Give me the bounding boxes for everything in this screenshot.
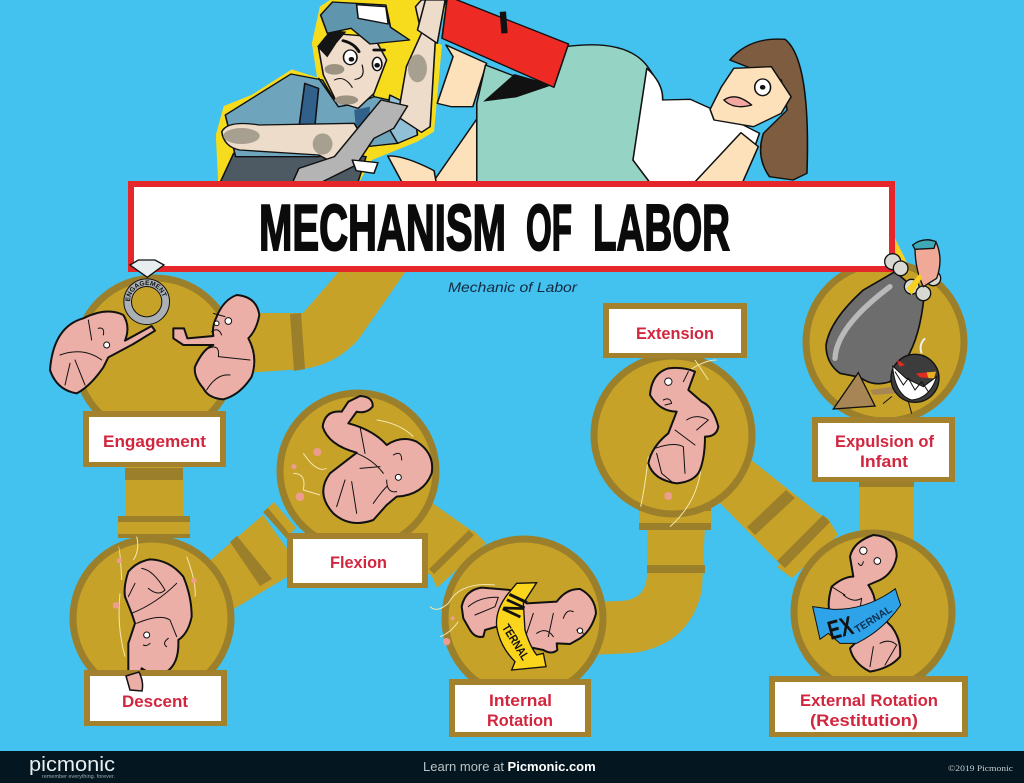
arrow: internal (496, 583, 546, 670)
engagement ring: ENGAGEMENT (125, 280, 167, 302)
label: external rotation: (Restitution) (810, 711, 918, 730)
pipe: external rotation to expulsion (859, 478, 914, 548)
label: internal rotation (449, 679, 591, 737)
label: expulsion of infant: Expulsion of (835, 432, 934, 451)
pipe: engagement to descent (118, 465, 190, 538)
descent baby (113, 537, 197, 692)
pipe network (118, 268, 914, 655)
label: extension (603, 303, 747, 358)
label: flexion: Flexion (330, 553, 387, 572)
title text: MECHANISM (259, 191, 506, 264)
footer copyright: ©2019 Picmonic (948, 764, 1014, 773)
pipe: descent to flexion (205, 502, 296, 610)
baby eye (104, 342, 110, 348)
cannon (826, 272, 924, 384)
baby pushing ring (173, 295, 259, 399)
baby with ring (50, 312, 155, 393)
cannon stand (833, 373, 875, 409)
title text: OF (526, 191, 572, 264)
extension baby (641, 360, 718, 527)
smoke cloud (885, 254, 941, 301)
label: internal rotation: Internal (489, 691, 552, 710)
arrow text: EX: EX (824, 610, 857, 646)
baby details (60, 320, 104, 385)
arrow text: TERNAL: TERNAL (853, 603, 895, 636)
external rotation baby (813, 535, 901, 672)
circle: external rotation (794, 533, 952, 691)
patient (388, 0, 807, 183)
circle: descent (73, 539, 231, 697)
engagement ring (123, 259, 170, 325)
footer link: Learn more at Picmonic.com (423, 759, 596, 774)
label: internal rotation: Rotation (487, 711, 553, 730)
label: extension: Extension (636, 324, 714, 343)
label: external rotation (769, 676, 968, 737)
label: flexion (287, 533, 428, 588)
cannon and bomb illustration (826, 238, 941, 413)
circle: flexion (280, 393, 436, 549)
illustration: mechanic and patient (216, 0, 807, 183)
label: engagement: Engagement (103, 432, 206, 451)
pipe: internal rotation to extension (590, 507, 711, 655)
pipe: engagement to banner (215, 268, 408, 375)
circle: extension (594, 356, 752, 514)
flash yellow (895, 238, 907, 267)
label: engagement (83, 411, 226, 467)
subtitle: Mechanic of Labor (448, 279, 578, 295)
arrow text: IN: IN (495, 589, 533, 622)
title banner (131, 184, 892, 269)
pipe: extension to external rotation (712, 455, 838, 578)
bomb (883, 338, 939, 413)
footer logo: picmonic (29, 754, 115, 776)
title text: LABOR (593, 191, 730, 264)
label: expulsion of infant (812, 417, 955, 482)
arrow: external (813, 589, 901, 643)
label: descent: Descent (122, 692, 188, 711)
pipe: flexion to internal rotation (405, 495, 486, 588)
descent baby hand over label (126, 672, 143, 691)
expelled figure (907, 240, 940, 295)
label: external rotation: External Rotation (800, 691, 938, 710)
circle: internal rotation (445, 539, 603, 697)
internal rotation baby (430, 583, 596, 670)
label: expulsion of infant: Infant (860, 452, 908, 471)
footer logo: remember everything. forever. (42, 774, 115, 780)
arrow text: TERNAL: TERNAL (499, 622, 532, 663)
engagement illustration (49, 259, 260, 400)
footer (0, 751, 1024, 783)
circle: engagement (76, 278, 234, 436)
label: descent (84, 670, 227, 726)
circle: expulsion (806, 263, 964, 421)
mechanic (216, 0, 447, 183)
flexion baby (291, 396, 432, 523)
stand base (870, 387, 895, 395)
